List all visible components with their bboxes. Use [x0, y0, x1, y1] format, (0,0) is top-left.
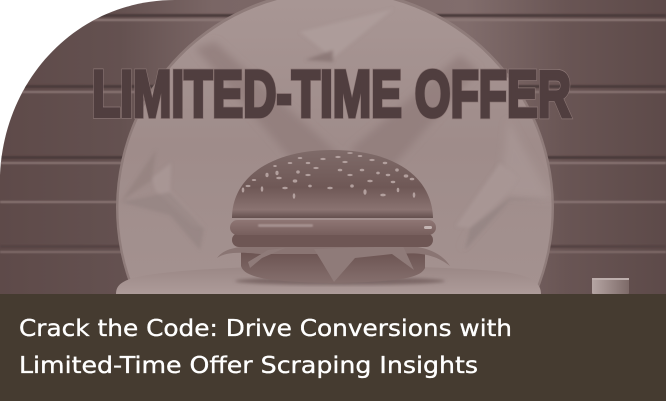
upper patty: [230, 220, 436, 235]
disc embossed shapes: [198, 43, 536, 190]
cup on the right: [592, 278, 629, 294]
footer title: [19, 314, 512, 379]
large round disc behind burger: [116, 0, 554, 294]
footer band: [0, 294, 666, 401]
hero image panel: [0, 0, 666, 294]
cheese: [248, 254, 414, 282]
top bun with sesame: [232, 150, 433, 218]
bottom bun: [241, 252, 425, 279]
table top: [116, 266, 541, 294]
striped wall background: [0, 0, 666, 294]
footer title: Crack the Code: Drive Conversions with: [19, 314, 512, 342]
lower patty: [232, 234, 433, 247]
burger: [217, 150, 450, 285]
footer title: Limited-Time Offer Scraping Insights: [19, 351, 478, 379]
lettuce: [217, 245, 450, 266]
